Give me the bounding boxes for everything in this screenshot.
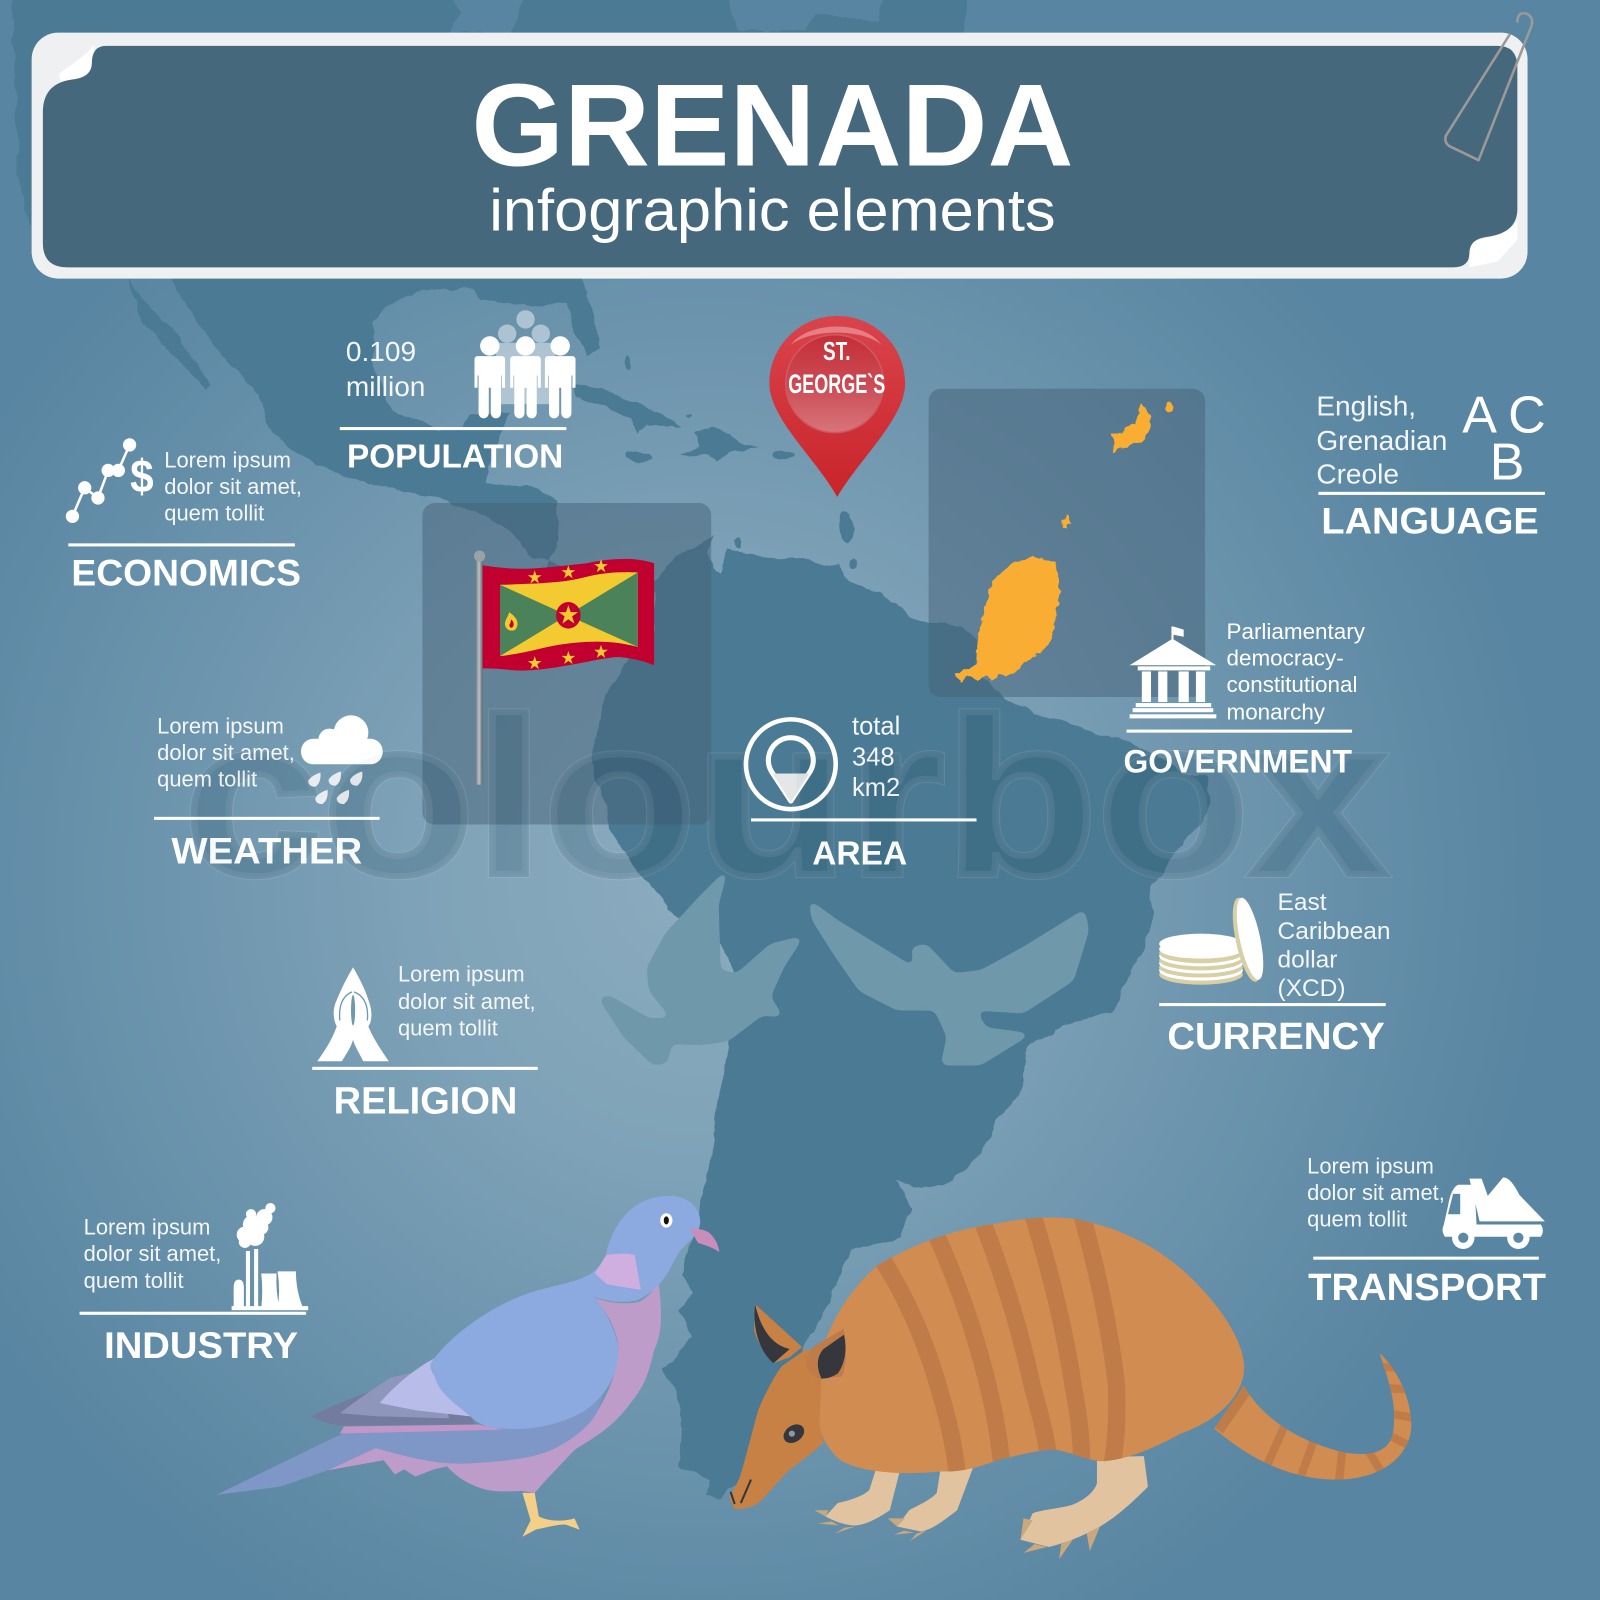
label: government: GOVERNMENT	[1123, 742, 1352, 779]
text: religion: dolor sit amet,	[398, 989, 536, 1014]
island: Petite Martinique	[1165, 403, 1173, 413]
armadillo claws	[814, 1510, 1100, 1559]
text: area: 348	[852, 743, 895, 771]
section: government	[1123, 619, 1366, 779]
banner corner curl	[59, 45, 1517, 267]
dove: left	[598, 867, 804, 1065]
watermark: colourbox: colourbox	[184, 671, 1388, 922]
map: Baja California	[128, 280, 211, 388]
text: government: Parliamentary	[1227, 619, 1366, 644]
icon: rain cloud	[301, 715, 383, 804]
flag nutmeg	[505, 612, 518, 631]
text: languages	[1316, 390, 1447, 490]
text: area	[852, 713, 900, 802]
map: Mexico and Central America	[168, 276, 673, 612]
panel: flag backdrop	[422, 503, 711, 824]
flag yellow field	[500, 572, 638, 656]
pin label	[788, 338, 885, 399]
label: industry: INDUSTRY	[104, 1325, 298, 1366]
armadillo head	[730, 1349, 823, 1509]
text: weather	[157, 714, 295, 792]
label: population: POPULATION	[347, 438, 563, 475]
text: transport: quem tollit	[1307, 1207, 1407, 1232]
text: colourbox	[184, 671, 1388, 922]
title: GRENADA	[471, 59, 1073, 190]
pin body	[769, 316, 905, 497]
text: currency: dollar	[1278, 946, 1337, 973]
subtitle: infographic elements	[489, 177, 1056, 244]
text: economics: Lorem ipsum	[164, 447, 291, 472]
icon: location ring	[746, 719, 836, 809]
pigeon breast	[328, 1280, 661, 1493]
text: transport	[1307, 1153, 1445, 1232]
label: religion: RELIGION	[334, 1079, 517, 1121]
illustration: pigeon	[216, 1196, 719, 1537]
text: currency	[1278, 889, 1390, 1002]
pigeon neck patch	[595, 1254, 641, 1290]
text: industry: Lorem ipsum	[84, 1215, 210, 1240]
dove: right	[808, 899, 1089, 1065]
text: religion: Lorem ipsum	[398, 962, 525, 987]
flag stars	[528, 559, 608, 669]
population value	[346, 336, 425, 402]
text: weather: dolor sit amet,	[157, 740, 295, 765]
map: Hispaniola	[681, 428, 759, 462]
map: North America above the banner	[41, 0, 969, 41]
text: government: monarchy	[1227, 699, 1326, 724]
banner face	[43, 46, 1517, 267]
text: government: constitutional	[1227, 672, 1357, 697]
section: economics	[66, 438, 302, 594]
icon: praying hands	[317, 967, 389, 1061]
title banner	[32, 13, 1532, 279]
map: Cuba	[573, 384, 681, 434]
pin label: ST.	[823, 338, 851, 366]
label: weather: WEATHER	[171, 830, 362, 871]
armadillo tail	[1214, 1353, 1412, 1480]
label: economics: ECONOMICS	[71, 553, 301, 594]
text: area: km2	[852, 774, 900, 802]
flag cloth	[483, 559, 654, 671]
icon: letters: B	[1490, 434, 1525, 492]
map of Grenada islands	[956, 403, 1173, 682]
pigeon eye	[660, 1213, 672, 1228]
map: left edge land	[12, 0, 41, 224]
map of the Americas	[12, 0, 1210, 1500]
armadillo front ear	[806, 1329, 846, 1379]
text: area: total	[852, 713, 900, 741]
paperclip	[1445, 13, 1532, 160]
section: industry	[80, 1203, 308, 1366]
flag centre emblem	[556, 602, 581, 629]
text: transport: Lorem ipsum	[1307, 1153, 1434, 1178]
text: languages: English,	[1316, 390, 1416, 421]
text: languages: Grenadian	[1316, 425, 1447, 456]
label: area: AREA	[812, 835, 907, 872]
text: currency: Caribbean	[1278, 918, 1390, 945]
text: religion: quem tollit	[398, 1016, 498, 1041]
text: industry: quem tollit	[84, 1268, 184, 1293]
pigeon pink stripe	[340, 1424, 503, 1434]
armadillo shell	[817, 1217, 1244, 1473]
flag of Grenada	[474, 551, 654, 785]
pigeon head and wing	[430, 1196, 700, 1429]
icon: letters: A	[1462, 387, 1497, 445]
label: currency: CURRENCY	[1167, 1015, 1385, 1057]
icon: letters: C	[1508, 387, 1546, 445]
text: economics: dolor sit amet,	[164, 474, 302, 499]
text: industry	[84, 1215, 221, 1293]
map: small Caribbean islands	[623, 357, 857, 569]
illustration: armadillo	[730, 1214, 1418, 1559]
icon: factory with smoke	[232, 1203, 308, 1310]
armadillo legs	[826, 1456, 1148, 1547]
section: language	[1316, 387, 1546, 542]
armadillo mouth	[731, 1480, 751, 1504]
section: transport	[1307, 1153, 1546, 1308]
section: religion	[312, 962, 538, 1121]
section: population	[340, 310, 576, 475]
text: religion	[398, 962, 536, 1041]
pigeon primary feathers	[311, 1358, 474, 1426]
pigeon leg	[522, 1493, 580, 1537]
text: weather: Lorem ipsum	[157, 714, 284, 739]
text: weather: quem tollit	[157, 767, 257, 792]
text: government: democracy-	[1227, 645, 1344, 670]
icon: letters	[1462, 387, 1546, 492]
text: currency: East	[1278, 889, 1327, 916]
population value: million	[346, 371, 425, 402]
icon: coins	[1159, 896, 1269, 985]
flag green triangles	[500, 572, 638, 656]
text: economics: quem tollit	[164, 500, 264, 525]
section: currency	[1159, 889, 1390, 1057]
island: Grenada	[956, 556, 1060, 682]
banner paper	[32, 33, 1528, 279]
panel: island map backdrop	[929, 389, 1205, 697]
population value: 0.109	[346, 336, 416, 367]
island: Carriacou	[1111, 403, 1151, 454]
text: languages: Creole	[1316, 459, 1399, 490]
armadillo back ear	[754, 1304, 802, 1363]
icon: government building	[1130, 627, 1216, 718]
text: transport: dolor sit amet,	[1307, 1180, 1445, 1205]
pin inner disc	[786, 335, 884, 433]
armadillo shell bands	[883, 1214, 1117, 1474]
label: transport: TRANSPORT	[1308, 1266, 1546, 1308]
text: industry: dolor sit amet,	[84, 1241, 221, 1266]
text: government	[1227, 619, 1366, 724]
pin highlight	[791, 326, 882, 345]
armadillo eye	[780, 1421, 808, 1447]
icon: growth chart with dollar: $	[130, 450, 154, 502]
icon: people group	[474, 310, 576, 418]
label: language: LANGUAGE	[1321, 501, 1539, 542]
watermark: colourbox: colourbox	[184, 671, 1388, 922]
flag pole	[474, 551, 485, 785]
doves watermark silhouettes	[598, 867, 1089, 1065]
pigeon tail and lower body	[216, 1377, 606, 1495]
section: area	[746, 713, 977, 872]
text: currency: (XCD)	[1278, 975, 1346, 1002]
text: economics	[164, 447, 302, 525]
capital pin: St. George's	[769, 316, 905, 497]
section: weather	[154, 714, 383, 871]
icon: growth chart with dollar	[66, 438, 154, 523]
icon: dump truck	[1443, 1177, 1545, 1249]
pigeon beak	[690, 1229, 719, 1252]
island: Ronde	[1061, 513, 1071, 530]
pin label: GEORGE`S	[788, 369, 885, 399]
map: South America	[592, 537, 1210, 1500]
